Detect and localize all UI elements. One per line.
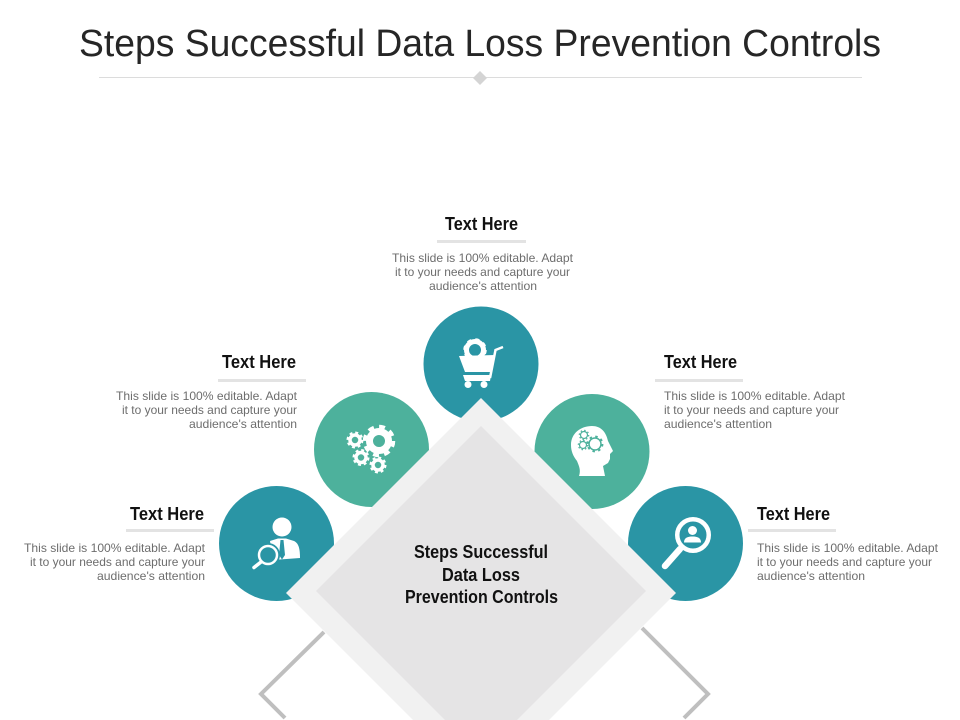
circle: top, cart icon [424,306,538,422]
text block: lower left: Text Here [130,504,204,524]
text block: upper left: it to your needs and capture your [122,403,297,417]
text block: top: Text Here [445,214,518,234]
text block: top [392,214,574,293]
text block: lower right [748,504,939,583]
text block: top: audience's attention [429,279,537,293]
text block: upper right: it to your needs and capture your [664,403,839,417]
text block: upper left: audience's attention [189,417,297,431]
icon: gear and shopping cart [459,340,503,388]
centre diamond, inner [316,426,646,720]
text block: upper left: This slide is 100% editable. Adapt [116,389,298,403]
outline diamond behind centre [261,628,708,718]
title: Steps Successful Data Loss Prevention Controls [79,23,881,65]
icon: head with gears [571,426,613,476]
circle: upper right, head icon [534,394,650,509]
text block: top: This slide is 100% editable. Adapt [392,251,574,265]
centre label: Data Loss [442,565,520,585]
text block: lower left: This slide is 100% editable. Adapt [24,541,206,555]
text block: lower left: it to your needs and capture your [30,555,205,569]
circle: lower right, magnifier icon [628,486,743,601]
text block: upper right: audience's attention [664,417,772,431]
centre label: Steps Successful [414,542,548,562]
text block: upper left: Text Here [222,352,296,372]
centre label: Prevention Controls [405,587,558,607]
text block: lower right: This slide is 100% editable. Adapt [757,541,939,555]
text block: upper left [116,352,306,431]
text block: lower right: Text Here [757,504,830,524]
title divider with diamond [99,71,862,85]
centre diamond, outer band [286,398,676,720]
text block: upper right [655,352,846,431]
text block: upper right: Text Here [664,352,737,372]
icon: magnifier with person [665,519,709,566]
text block: lower left [24,504,214,583]
text block: top: it to your needs and capture your [395,265,570,279]
text block: lower right: audience's attention [757,569,865,583]
circle: lower left, person icon [219,486,334,601]
icon: businessman with magnifier [254,518,300,568]
text block: lower right: it to your needs and capture your [757,555,932,569]
centre label [405,542,558,607]
icon: four gears [348,426,394,472]
text block: lower left: audience's attention [97,569,205,583]
text block: upper right: This slide is 100% editable. Adapt [664,389,846,403]
circle: upper left, gears icon [314,392,429,507]
